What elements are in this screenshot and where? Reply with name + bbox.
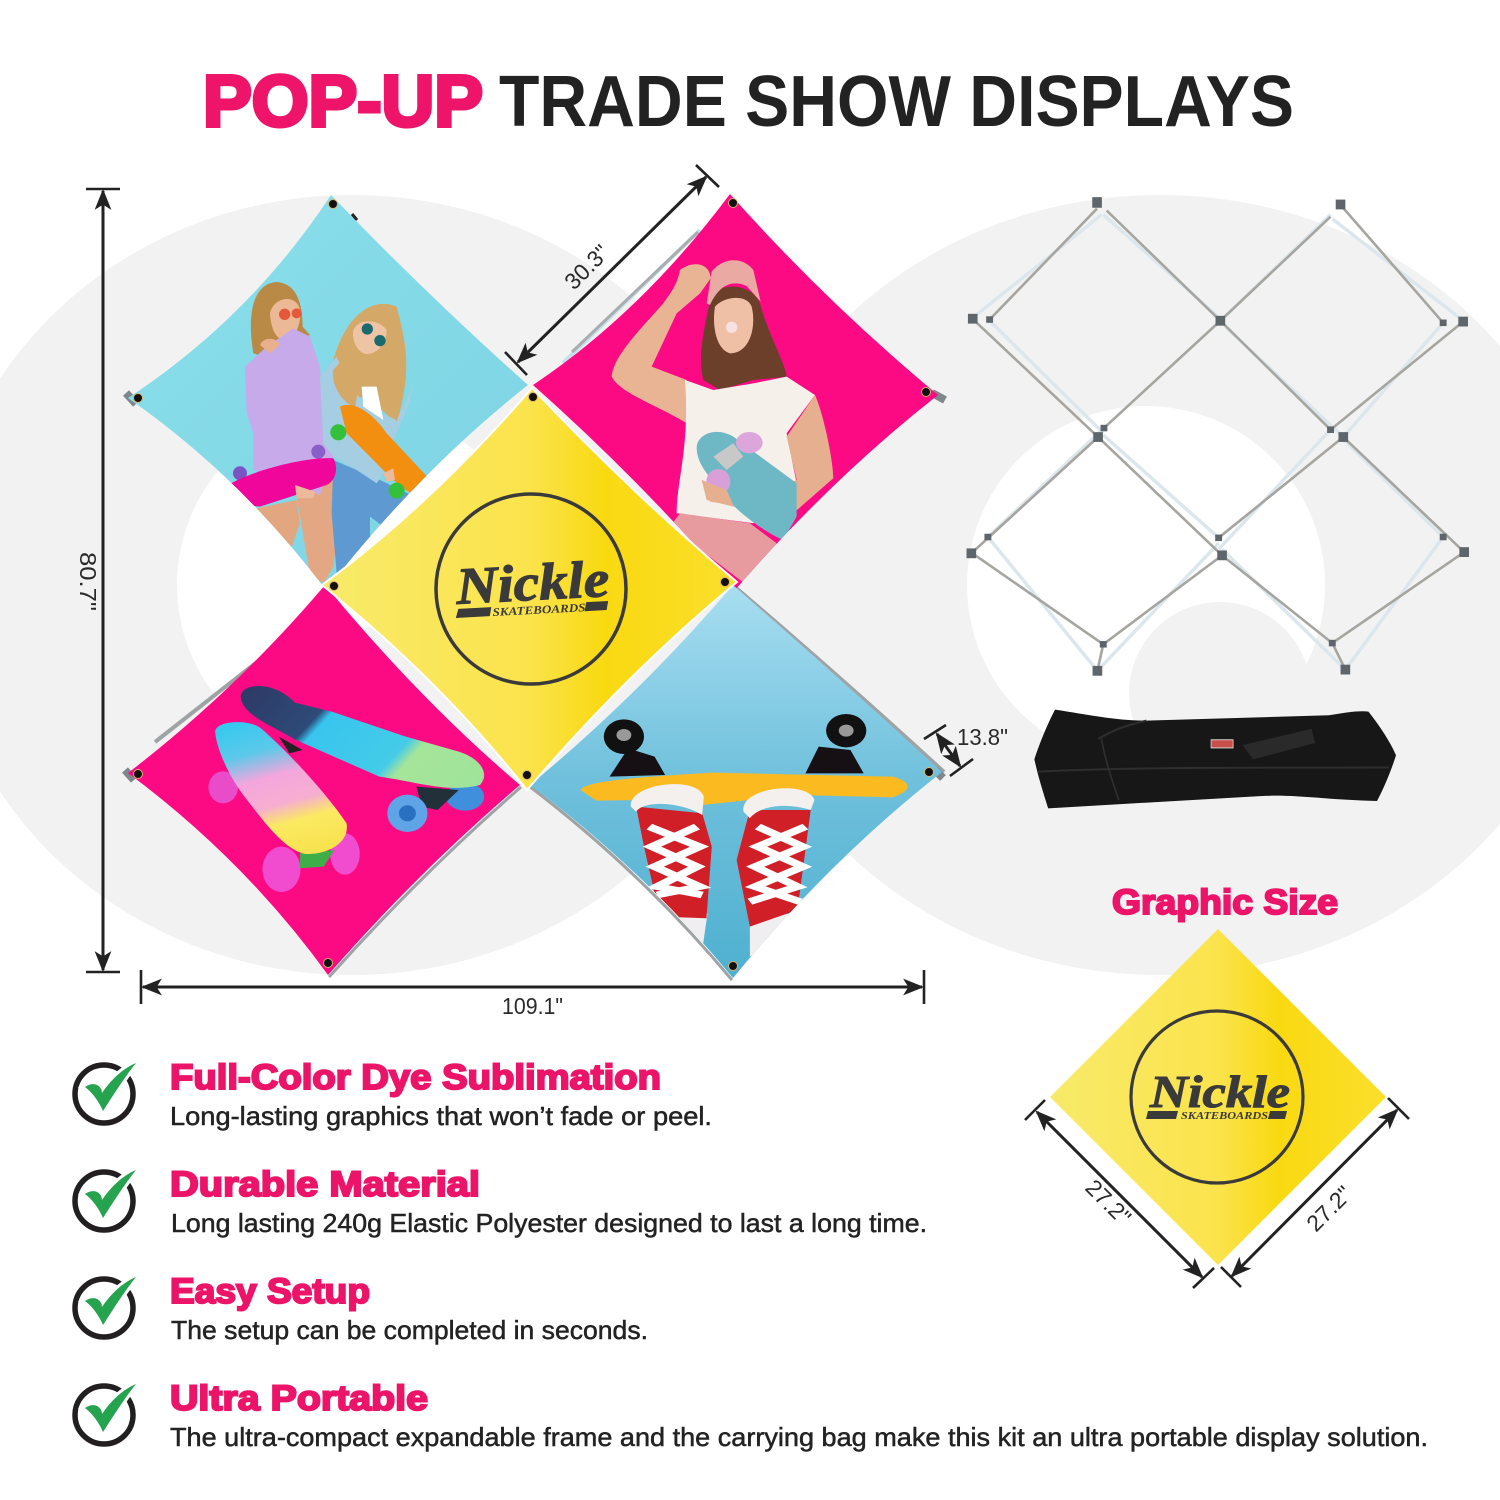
logo: Nickle Skateboards <box>436 494 626 684</box>
logo: Nickle Skateboards: SKATEBOARDS <box>492 602 586 619</box>
red sneakers <box>631 784 814 957</box>
striped long skateboard <box>241 686 484 832</box>
feature: Ultra Portable: The ultra-compact expandable frame and the carrying bag make this kit an ultra portable display solution. <box>170 1422 1428 1452</box>
feature: Full-Color Dye Sublimation: Full-Color Dye Sublimation <box>170 1058 661 1097</box>
dimension: depth 13.8 inches: 13.8" <box>957 724 1008 750</box>
dimension: height 80.7 inches <box>75 189 120 972</box>
frame peeking behind the display <box>125 214 945 980</box>
logo: Nickle Skateboards small: Nickle <box>1149 1066 1290 1117</box>
title: TRADE SHOW DISPLAYS <box>499 62 1294 142</box>
title: POP-UP <box>203 62 483 142</box>
yellow skateboard with black wheels <box>580 714 908 805</box>
dimension: graphic side left 27.2 inches <box>1025 1100 1214 1288</box>
heading: Graphic Size: Graphic Size <box>1112 883 1338 922</box>
girl with lilac hoodie <box>245 282 337 583</box>
feature: Easy Setup: Easy Setup <box>170 1272 370 1311</box>
feature: Full-Color Dye Sublimation: Long-lasting graphics that won’t fade or peel. <box>170 1101 712 1131</box>
feature: Ultra Portable <box>75 1379 1428 1452</box>
panel: magenta diamond with girl <box>533 194 938 590</box>
dimension: width 109.1 inches: 109.1" <box>502 993 563 1019</box>
panel: teal diamond with two girls <box>128 195 528 590</box>
illustration: collapsible frame <box>967 197 1469 676</box>
feature: Easy Setup <box>75 1272 648 1345</box>
logo: Nickle Skateboards small <box>1131 1011 1303 1183</box>
logo: Nickle Skateboards: Nickle <box>454 551 611 616</box>
background: grey rings <box>0 195 1500 975</box>
icon: check mark <box>75 1063 136 1123</box>
girl with bubble gum <box>612 260 833 585</box>
dimension: height 80.7 inches: 80.7" <box>75 552 101 611</box>
grommets <box>134 198 934 970</box>
logo: Nickle Skateboards small: SKATEBOARDS <box>1181 1111 1268 1122</box>
illustration: carrying bag <box>1034 710 1396 808</box>
feature: Durable Material: Long lasting 240g Elastic Polyester designed to last a long time. <box>171 1208 927 1238</box>
dimension: graphic side left 27.2 inches: 27.2" <box>1080 1174 1136 1230</box>
dimension: graphic side right 27.2 inches: 27.2" <box>1301 1181 1357 1237</box>
icon: check mark <box>75 1384 136 1444</box>
dimension: graphic side right 27.2 inches <box>1221 1098 1409 1287</box>
feature: Ultra Portable: Ultra Portable <box>170 1379 428 1418</box>
feature: Easy Setup: The setup can be completed in seconds. <box>171 1315 648 1345</box>
pink skateboard <box>228 445 336 507</box>
feature: Durable Material: Durable Material <box>170 1165 480 1204</box>
girl with denim jacket <box>320 304 422 573</box>
teal skateboard <box>697 432 797 540</box>
orange skateboard <box>330 405 435 499</box>
icon: check mark <box>75 1170 136 1230</box>
dimension: panel 30.3 inches: 30.3" <box>559 239 614 295</box>
panel: magenta diamond with skateboards <box>128 585 520 975</box>
feature: Durable Material <box>75 1165 927 1238</box>
icon: check mark <box>75 1277 136 1337</box>
rainbow short skateboard <box>208 722 360 892</box>
panel: yellow logo diamond <box>322 388 737 790</box>
dimension: panel 30.3 inches <box>505 165 719 375</box>
panel: blue diamond with shoes on skateboard <box>530 585 942 978</box>
dimension: depth 13.8 inches <box>924 724 1008 776</box>
panel: graphic size diamond <box>1050 929 1386 1265</box>
feature: Full-Color Dye Sublimation <box>75 1058 712 1131</box>
dimension: width 109.1 inches <box>141 970 924 1019</box>
